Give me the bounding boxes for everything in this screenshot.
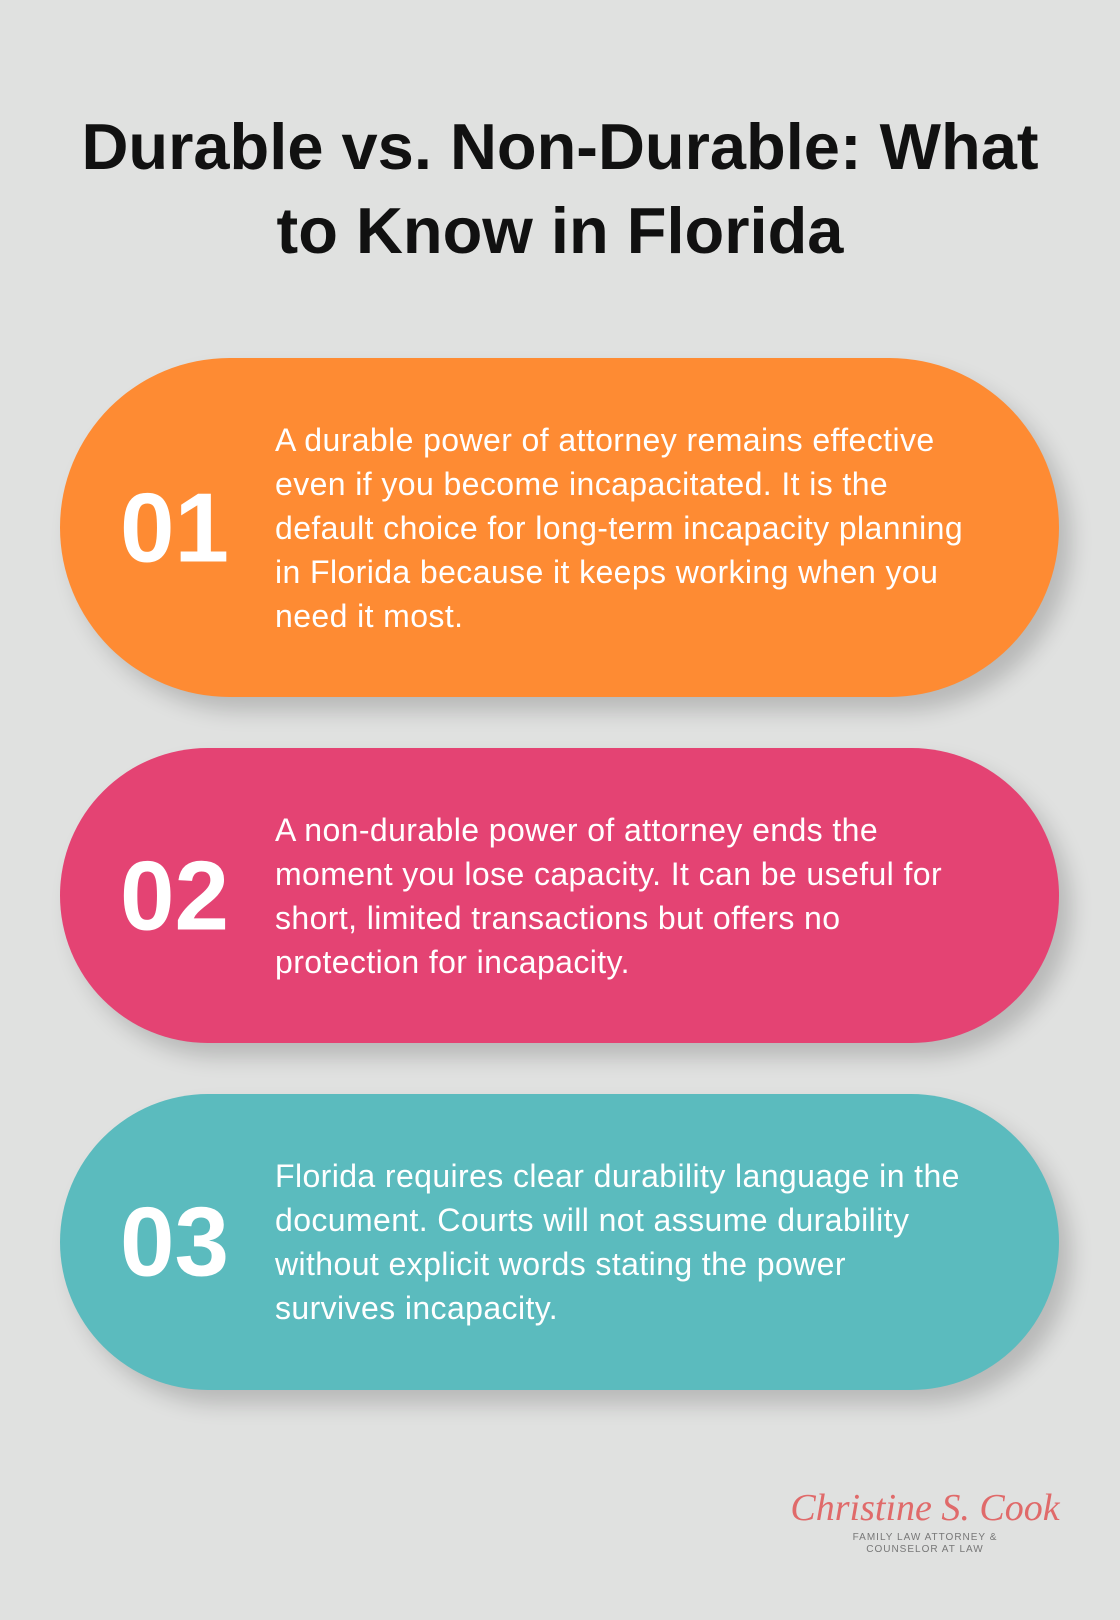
text 01 [275,422,963,634]
title: to Know in Florida [277,194,843,267]
text 03: without explicit words stating the power [275,1246,846,1282]
text 01: A durable power of attorney remains effective [275,422,935,458]
text 02: A non-durable power of attorney ends the [275,812,878,848]
text 01: default choice for long-term incapacity planning [275,510,963,546]
logo [790,1487,1060,1555]
panel: 03 durability language [60,1094,1059,1390]
text 03: document. Courts will not assume durability [275,1202,909,1238]
text 03: survives incapacity. [275,1290,558,1326]
text 02: short, limited transactions but offers no [275,900,840,936]
number 02: 02 [120,840,229,950]
text 01: in Florida because it keeps working when you [275,554,938,590]
title [81,110,1039,267]
logo: Christine S. Cook [790,1487,1060,1529]
panel: 01 durable [60,358,1059,697]
text 01: even if you become incapacitated. It is the [275,466,888,502]
panel: 02 non-durable [60,748,1059,1043]
logo: FAMILY LAW ATTORNEY & [853,1532,997,1543]
text 02 [275,812,942,980]
text 03 [275,1158,960,1326]
number 01: 01 [120,472,229,582]
text 02: protection for incapacity. [275,944,630,980]
text 02: moment you lose capacity. It can be useful for [275,856,942,892]
title: Durable vs. Non-Durable: What [81,110,1039,183]
number 03: 03 [120,1186,229,1296]
logo: COUNSELOR AT LAW [866,1544,984,1555]
text 03: Florida requires clear durability language in the [275,1158,960,1194]
text 01: need it most. [275,598,463,634]
